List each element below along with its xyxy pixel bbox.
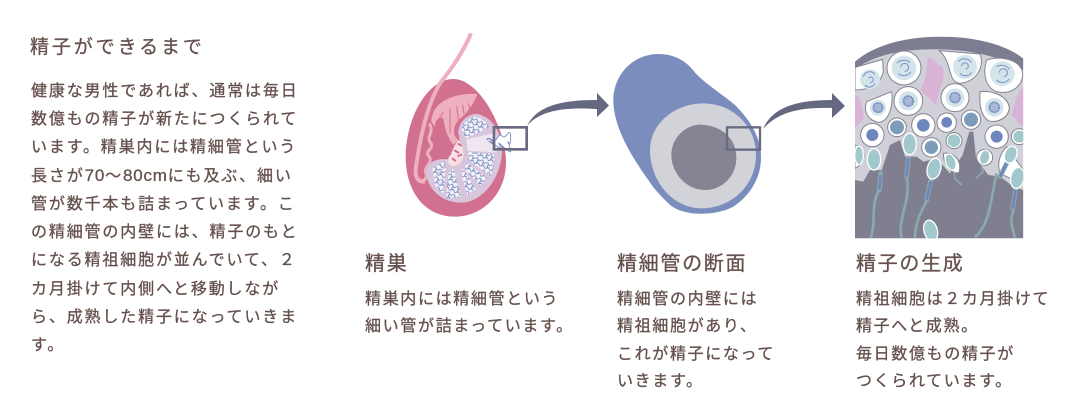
sperm midpieces — [879, 158, 1016, 208]
magnified squiggle — [487, 132, 511, 152]
text: つくられています。 — [856, 373, 1013, 390]
lumen tissue — [855, 132, 1023, 238]
text: testis — [365, 290, 574, 335]
text: 精祖細胞があり、 — [617, 318, 758, 335]
text: 細い管が詰まっています。 — [365, 318, 574, 335]
testis body — [406, 79, 506, 217]
text: 精子へと成熟。 — [856, 318, 979, 335]
sperm heads — [855, 133, 1026, 243]
text: production — [856, 290, 1050, 390]
sperm tails — [871, 167, 1015, 238]
tissue background — [855, 37, 1023, 238]
arrow 2 — [763, 93, 845, 129]
intro text block: 健康な男性であれば、通常は毎日 — [31, 82, 299, 100]
illustration: spermatogenesis detail — [855, 37, 1027, 243]
intro text block: の精細管の内壁には、精子のもと — [31, 224, 298, 241]
arrow 1 — [527, 93, 609, 126]
tubule outer — [613, 54, 761, 214]
rete testis — [448, 140, 464, 166]
text: cross-section — [617, 290, 775, 390]
lobule disc — [427, 114, 502, 203]
heading: testis: 精巣 — [365, 253, 408, 275]
condensed nuclei — [873, 93, 999, 112]
spermatogonia large cells — [855, 51, 1027, 183]
intro text block: カ月掛けて内側へと移動しなが — [31, 281, 280, 298]
text: 毎日数億もの精子が — [856, 346, 1015, 363]
heading: cross-section: 精細管の断面 — [617, 253, 747, 275]
intro text block: います。精巣内には精細管という — [31, 139, 297, 156]
basement membrane — [855, 37, 1023, 70]
illustration: testis — [406, 33, 527, 217]
intro text block — [31, 82, 299, 354]
intro text block: 長さが70～80cmにも及ぶ、細い — [31, 166, 293, 185]
caption: tubule cross-section — [617, 252, 775, 390]
intro text block: ら、成熟した精子になっていきま — [31, 309, 298, 326]
highlight box — [727, 127, 760, 150]
round spermatids — [866, 117, 1003, 143]
purple patches — [855, 57, 1023, 128]
tubule wall — [650, 103, 756, 208]
caption: sperm production — [856, 252, 1050, 390]
text: testis: 精巣内には精細管という — [365, 291, 559, 308]
text: cross-section: 精細管の内壁には — [617, 291, 758, 308]
title: 精子ができるまで — [30, 37, 205, 58]
intro text block: になる精祖細胞が並んでいて、２ — [31, 252, 297, 269]
text: production: 精祖細胞は２カ月掛けて — [856, 291, 1050, 308]
cell nuclei — [860, 55, 1015, 117]
duct — [416, 33, 471, 182]
intro text block: す。 — [31, 337, 65, 354]
illustrations — [406, 32, 1024, 238]
illustration: tubule cross-section — [613, 54, 761, 214]
intro text block: 数億もの精子が新たにつくられて — [31, 111, 298, 128]
text: いきます。 — [617, 373, 704, 390]
epididymis — [431, 94, 477, 145]
highlight box — [494, 127, 527, 149]
nucleus squiggles — [863, 59, 1009, 87]
text: これが精子になって — [617, 346, 775, 363]
lumen — [671, 125, 736, 190]
heading: production: 精子の生成 — [856, 253, 964, 275]
seminiferous tubules — [432, 117, 494, 199]
intro text block: 管が数千本も詰まっています。こ — [31, 196, 296, 213]
caption: testis — [365, 252, 574, 335]
